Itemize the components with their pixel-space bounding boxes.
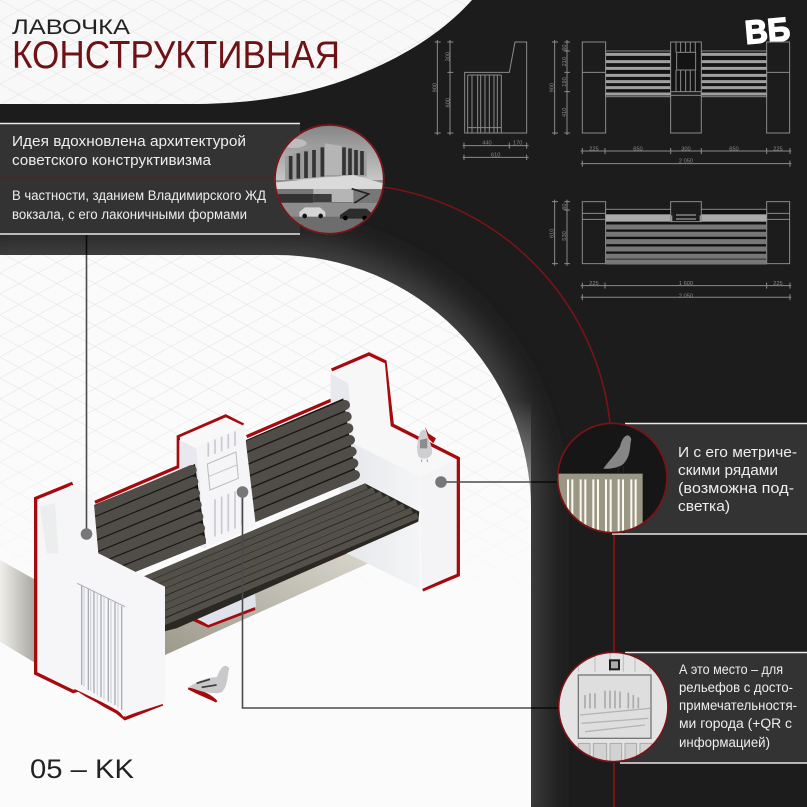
drawing: plan view bbox=[549, 200, 791, 300]
technical drawings bbox=[433, 40, 791, 300]
leader line: idea to bench bbox=[81, 235, 92, 540]
right end block bbox=[331, 356, 457, 589]
idea text heading: советского конструктивизма bbox=[12, 152, 212, 169]
white area: top header bbox=[0, 0, 472, 104]
circle: relief close-up bbox=[558, 652, 668, 763]
idea text details: В частности, зданием Владимирского ЖД bbox=[12, 188, 266, 203]
reliefs text: А это место – для bbox=[679, 662, 783, 677]
red connecting vertical bbox=[613, 533, 615, 807]
metric rows text bbox=[678, 444, 797, 515]
drawing: side view: 300 bbox=[445, 52, 451, 61]
drawing: side view: 170 bbox=[513, 141, 522, 147]
leader line: end block to circle bbox=[435, 476, 558, 488]
metric rows text: скими рядами bbox=[678, 462, 778, 479]
metric rows text: (возможна под- bbox=[678, 480, 794, 497]
drawing: plan view: 610 bbox=[549, 229, 555, 238]
drawing: front view: 210 bbox=[562, 57, 568, 66]
icon: pigeon on armrest bbox=[417, 427, 436, 462]
left end block bbox=[38, 485, 165, 717]
centre leg bbox=[197, 592, 256, 625]
drawing: front view: 650 bbox=[633, 146, 643, 152]
photo circle: railway station bbox=[274, 124, 384, 234]
drawing: front view: 225 bbox=[589, 146, 599, 152]
label: model code: 05 – KK bbox=[30, 754, 134, 784]
drawing: side view bbox=[433, 40, 529, 160]
metric rows text: И с его метриче- bbox=[678, 444, 797, 461]
heading: title bbox=[12, 16, 340, 77]
panel: metric rows bbox=[612, 424, 807, 534]
drawing: front view: 2 050 bbox=[679, 159, 693, 165]
drawing: side view: 900 bbox=[433, 83, 439, 92]
drawing: plan view: 2 050 bbox=[679, 293, 693, 299]
drawing: front view bbox=[549, 40, 791, 167]
idea text details bbox=[12, 188, 266, 222]
reliefs text: информацией) bbox=[679, 735, 770, 750]
drawing: front view: 900 bbox=[549, 83, 555, 92]
drawing: plan view: 1 600 bbox=[679, 281, 693, 287]
reliefs text: примечательностя- bbox=[679, 698, 797, 713]
idea text heading: Идея вдохновлена архитектурой bbox=[12, 133, 246, 150]
drawing: side view: 600 bbox=[445, 98, 451, 107]
drawing: plan view: 530 bbox=[562, 231, 568, 241]
drawing: front view: 410 bbox=[562, 108, 568, 117]
reliefs text bbox=[679, 662, 797, 750]
centre post bbox=[179, 417, 256, 548]
leader line: post to relief circle bbox=[237, 486, 558, 708]
drawing: front view: 650 bbox=[729, 146, 739, 152]
back slats: left section bbox=[94, 464, 206, 585]
red offset outline bbox=[36, 354, 458, 719]
reliefs text: ми города (+QR с bbox=[679, 716, 792, 731]
idea text heading bbox=[12, 133, 246, 169]
drawing: plan view: 225 bbox=[773, 281, 783, 287]
metric rows text: светка) bbox=[678, 498, 730, 515]
drawing: side view: 440 bbox=[482, 141, 492, 147]
seat slats bbox=[100, 483, 419, 632]
title line 2: КОНСТРУКТИВНАЯ bbox=[12, 34, 340, 77]
white area: bench background bbox=[0, 255, 531, 807]
circle: illuminated ribs with pigeon bbox=[557, 423, 667, 537]
drawing: side view: 610 bbox=[491, 153, 500, 159]
ribbed relief bbox=[77, 583, 125, 710]
title line 1: ЛАВОЧКА bbox=[12, 16, 130, 39]
drawing: plan view: 60 bbox=[562, 203, 568, 210]
drawing: front view: 300 bbox=[681, 146, 691, 152]
reliefs text: рельефов с досто- bbox=[679, 680, 793, 695]
ground shadow bbox=[0, 553, 370, 663]
illustration: isometric bench bbox=[0, 354, 458, 719]
idea text details: вокзала, с его лаконичными формами bbox=[12, 207, 247, 222]
back slats: right section bbox=[240, 398, 357, 523]
drawing: front view: 225 bbox=[773, 146, 783, 152]
drawing: front view: 60 bbox=[562, 45, 568, 51]
panel: reliefs bbox=[620, 652, 807, 763]
panel: idea bbox=[0, 124, 300, 234]
icon: pigeon on ground bbox=[188, 666, 229, 702]
drawing: plan view: 225 bbox=[589, 281, 599, 287]
glow around white area bbox=[0, 240, 542, 807]
logo: ВБ bbox=[743, 10, 791, 51]
red connecting arc bbox=[383, 187, 610, 423]
drawing: front view: 190 bbox=[562, 77, 568, 87]
